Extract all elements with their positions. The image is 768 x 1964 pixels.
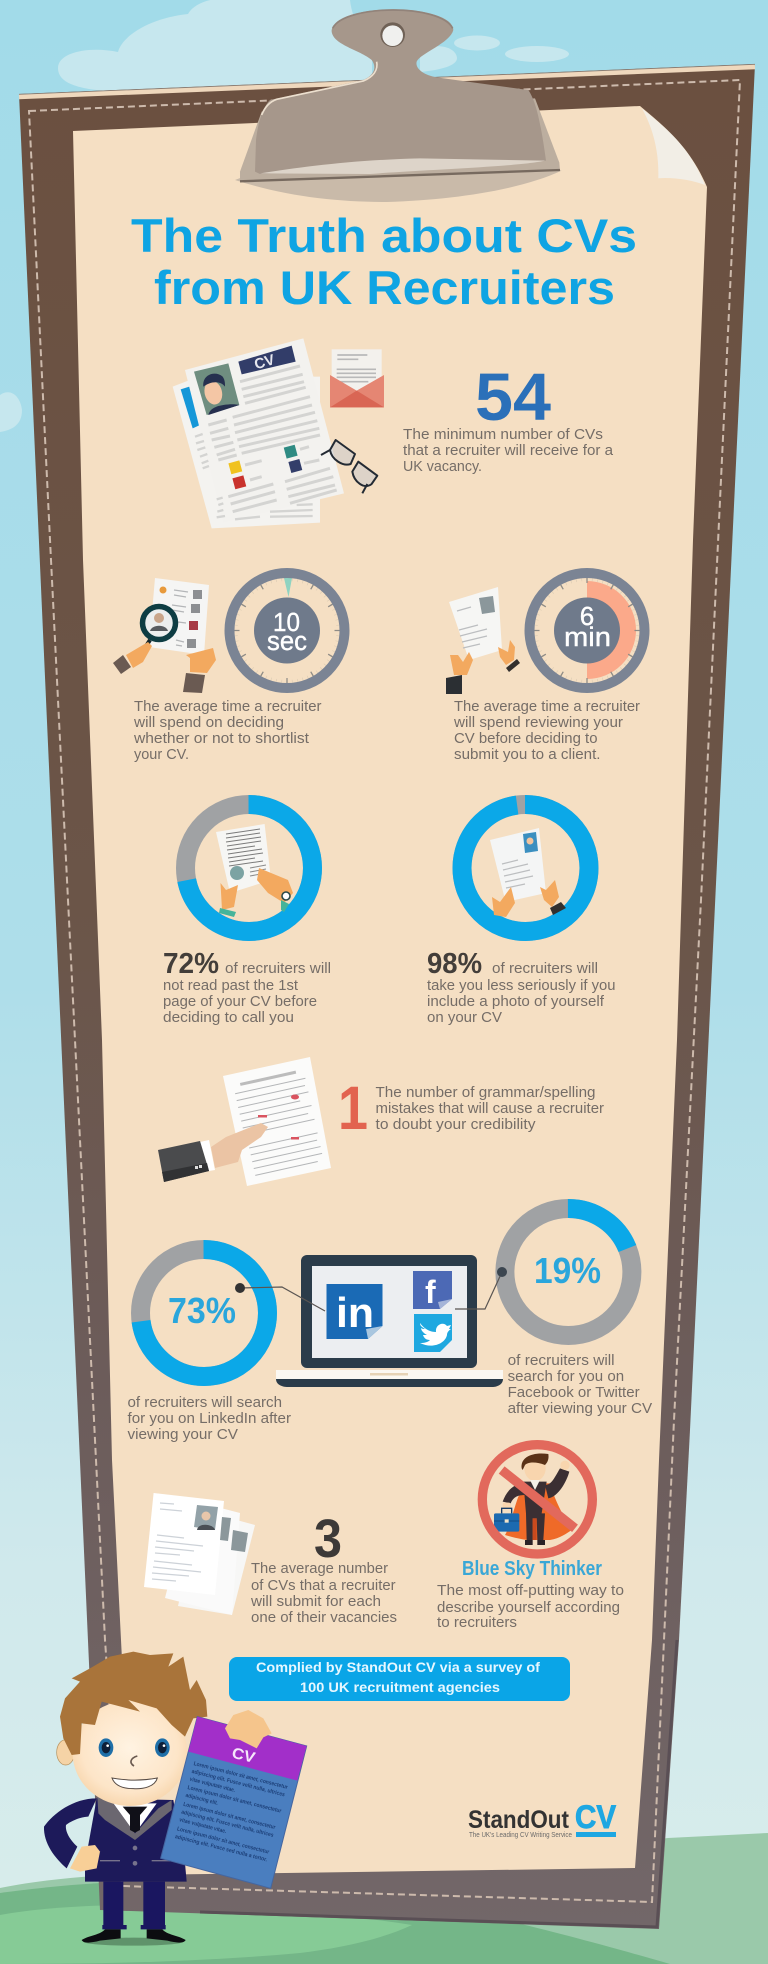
stat: 1 mistake [338,1074,604,1142]
timer: 10 sec: sec [267,626,307,656]
donut: 73% LinkedIn: 73% [168,1290,236,1331]
text: 98% statistic: 98% [427,948,482,980]
legs and shoes [82,1882,186,1943]
card text: Lorem ipsum dolor sit amet, consectetur [182,1802,277,1831]
card text: Lorem ipsum dolor sit amet, consectetur [193,1761,289,1791]
stat: 1 mistake: to doubt your credibility [376,1117,536,1133]
logo: StandOut CV: CV [575,1799,617,1835]
text: 98% statistic: of recruiters will [492,961,598,977]
logo: StandOut CV: The UK's Leading CV Writing Service [469,1830,572,1839]
clip hole [380,22,405,47]
card text: vitae vulputate vitae. [179,1817,227,1835]
card text: adipiscing elit. [185,1793,219,1807]
text: Blue Sky Thinker [437,1558,624,1631]
text: 6 min description: CV before deciding to [454,731,598,747]
illustration: hands holding CV [446,587,520,694]
callout: survey source: Complied by StandOut CV via a survey of [256,1660,541,1675]
illustration: CV pile, envelope and glasses [173,338,384,528]
icon: prohibited superhero businessman [482,1445,592,1554]
clipboard clip [235,9,562,202]
timer: 6 min [530,573,644,688]
icon: LinkedIn: in [336,1289,374,1336]
stat: 3 CVs submitted: one of their vacancies [251,1610,397,1626]
gripping hand [225,1710,272,1748]
callout: survey source: 100 UK recruitment agencies [300,1680,500,1695]
text: 19% description: after viewing your CV [508,1401,652,1417]
card text: Lorem ipsum dolor sit amet, consectetur [176,1826,270,1856]
text: 72% statistic [163,948,331,1026]
text: 6 min description: The average time a recruiter [454,699,640,715]
card text: adipiscing elit. Fusce sed nulla a tortor. [174,1834,268,1863]
stat: 1 mistake: mistakes that will cause a recruiter [376,1101,604,1117]
icon: Facebook: f [425,1274,436,1310]
text: 10 sec description [133,699,322,763]
text: 98% statistic: on your CV [427,1010,502,1026]
text: 73% description: for you on LinkedIn after [128,1411,291,1427]
held CV card: CV [230,1745,258,1767]
text: 72% statistic: of recruiters will [225,961,331,977]
stat: 3 CVs submitted: will submit for each [250,1594,381,1610]
illustration: three CVs [144,1493,255,1615]
text: 73% description: of recruiters will search [128,1395,282,1411]
stat: 3 CVs submitted [250,1509,397,1626]
text: 10 sec description: your CV. [134,747,189,763]
text: 19% description: of recruiters will [508,1353,615,1369]
paper sheet [73,106,707,1875]
text: 98% statistic [427,948,616,1026]
text: 98% statistic: take you less seriously if you [427,978,616,994]
held CV card [161,1710,307,1888]
stat: 1 mistake: 1 [338,1074,368,1142]
connector: LinkedIn to 73% [235,1283,325,1311]
icon: Facebook [413,1271,452,1310]
timer: 10 sec: 10 [273,607,300,637]
donut: 72% [186,804,312,932]
donut: 19% Facebook and Twitter [505,1208,632,1336]
icon: LinkedIn [326,1284,382,1339]
text: Blue Sky Thinker: The most off-putting way to [437,1583,624,1599]
text: Blue Sky Thinker: to recruiters [437,1615,517,1631]
logo: StandOut CV: StandOut [468,1806,570,1834]
card text: Lorem ipsum dolor sit amet, consectetur [187,1785,283,1815]
timer: 6 min: min [564,622,611,652]
text: 72% statistic: page of your CV before [163,994,317,1010]
stat: 54 CVs [403,360,614,475]
envelope [330,349,384,407]
glasses [321,440,377,493]
text: Blue Sky Thinker: describe yourself according [437,1600,620,1616]
background: clouds [0,0,569,432]
text: 6 min description: submit you to a client. [454,747,600,763]
text: Blue Sky Thinker: Blue Sky Thinker [462,1558,602,1580]
stat: 3 CVs submitted: The average number [251,1561,388,1577]
stat: 54 CVs: 54 [475,360,551,435]
donut: 98% [462,804,589,932]
timer: 10 sec [230,573,344,688]
character: smiling man holding CV [44,1652,307,1946]
title: from UK Recruiters [154,261,615,314]
card text: adipiscing elit. Fusce velit nulla, ultrices [180,1810,274,1839]
text: 10 sec description: will spend on deciding [133,715,284,731]
donut: 73% LinkedIn [140,1250,268,1376]
illustration: hands holding photo CV [490,828,566,917]
stat: 3 CVs submitted: of CVs that a recruiter [251,1578,396,1594]
text: 72% statistic: 72% [163,948,219,980]
stat: 54 CVs: UK vacancy. [403,459,482,475]
text: 6 min description [453,699,640,763]
callout: survey source [229,1657,570,1701]
title: The Truth about CVs [131,209,637,262]
text: 72% statistic: not read past the 1st [163,978,298,994]
icon: Twitter [414,1314,452,1352]
text: 10 sec description: The average time a recruiter [134,699,322,715]
stat: 1 mistake: The number of grammar/spelling [376,1085,596,1101]
text: 19% description [508,1353,652,1417]
suit [44,1797,187,1882]
paper curl [642,108,705,185]
stat: 3 CVs submitted: 3 [314,1509,342,1569]
text: 73% description [128,1395,291,1443]
stat: 54 CVs: The minimum number of CVs [403,427,603,443]
background: green hills [0,1833,768,1964]
shadow [83,1938,183,1946]
text: 98% statistic: include a photo of yourself [427,994,605,1010]
text: 10 sec description: whether or not to shortlist [133,731,309,747]
laptop with social icons [276,1255,503,1387]
timer: 6 min: 6 [580,601,594,631]
card text: vitae vulputate vitae. [189,1777,236,1794]
illustration: hands reading page [216,824,293,917]
text: 6 min description: will spend reviewing your [453,715,623,731]
stat: 54 CVs: that a recruiter will receive for a [403,443,614,459]
illustration: recruiter with magnifier on CV [113,578,216,693]
illustration: hand pointing at marked-up sheet [158,1057,331,1186]
text: 73% description: viewing your CV [128,1427,238,1443]
connector: Facebook/Twitter to 19% [455,1267,507,1309]
hand on hip [70,1845,100,1872]
donut: 19% Facebook and Twitter: 19% [534,1250,601,1291]
head [57,1652,207,1806]
title [131,209,637,314]
card text: adipiscing elit. Fusce velit nulla, ultrices [191,1769,285,1798]
text: 72% statistic: deciding to call you [163,1010,294,1026]
logo: StandOut CV [468,1799,617,1839]
illustration: CV pile, envelope and glasses: CV [253,352,277,373]
text: 19% description: Facebook or Twitter [508,1385,640,1401]
card text [174,1761,289,1864]
text: 19% description: search for you on [508,1369,624,1385]
